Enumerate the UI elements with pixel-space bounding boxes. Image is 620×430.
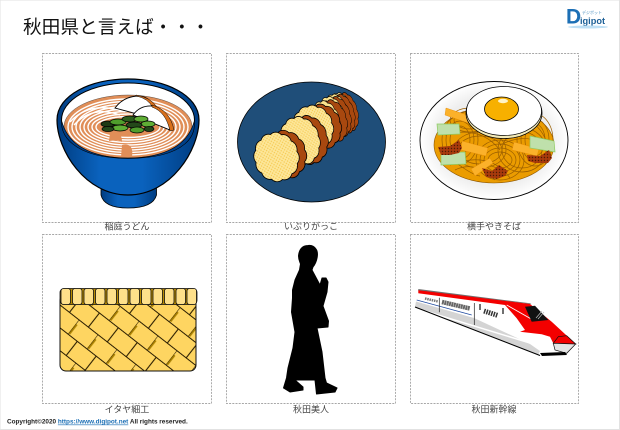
logo: Digipot: デジポット xyxy=(582,9,602,15)
icon: yakisoba plate xyxy=(420,82,568,200)
panel: イタヤ細工 xyxy=(42,234,212,414)
panel: 横手やきそば xyxy=(410,54,578,232)
logo: Digipot xyxy=(566,6,608,28)
panel: 秋田美人 xyxy=(226,234,396,414)
panel: いぶりがっこ xyxy=(226,54,396,232)
title: 秋田県と言えば・・・ xyxy=(23,16,210,38)
copyright footer: Copyright©2020 https://www.digipot.net All rights reserved. xyxy=(7,418,188,426)
icon: udon bowl xyxy=(57,79,199,208)
icon: woven basket xyxy=(60,288,197,371)
icon: iburigakko on plate xyxy=(238,82,386,202)
caption: 横手やきそば xyxy=(467,220,521,232)
caption: イタヤ細工 xyxy=(105,404,149,414)
icon: kimono woman silhouette xyxy=(284,245,337,394)
caption: いぶりがっこ xyxy=(284,220,338,232)
logo: Digipot: igipot xyxy=(580,16,605,26)
panel: 稲庭うどん xyxy=(42,54,212,232)
panel: 秋田新幹線 xyxy=(410,234,578,414)
caption: 稲庭うどん xyxy=(104,220,150,232)
logo: Digipot: D xyxy=(566,6,581,28)
caption: 秋田美人 xyxy=(293,404,329,414)
icon: Shinkansen train xyxy=(415,289,576,356)
caption: 秋田新幹線 xyxy=(471,404,517,414)
